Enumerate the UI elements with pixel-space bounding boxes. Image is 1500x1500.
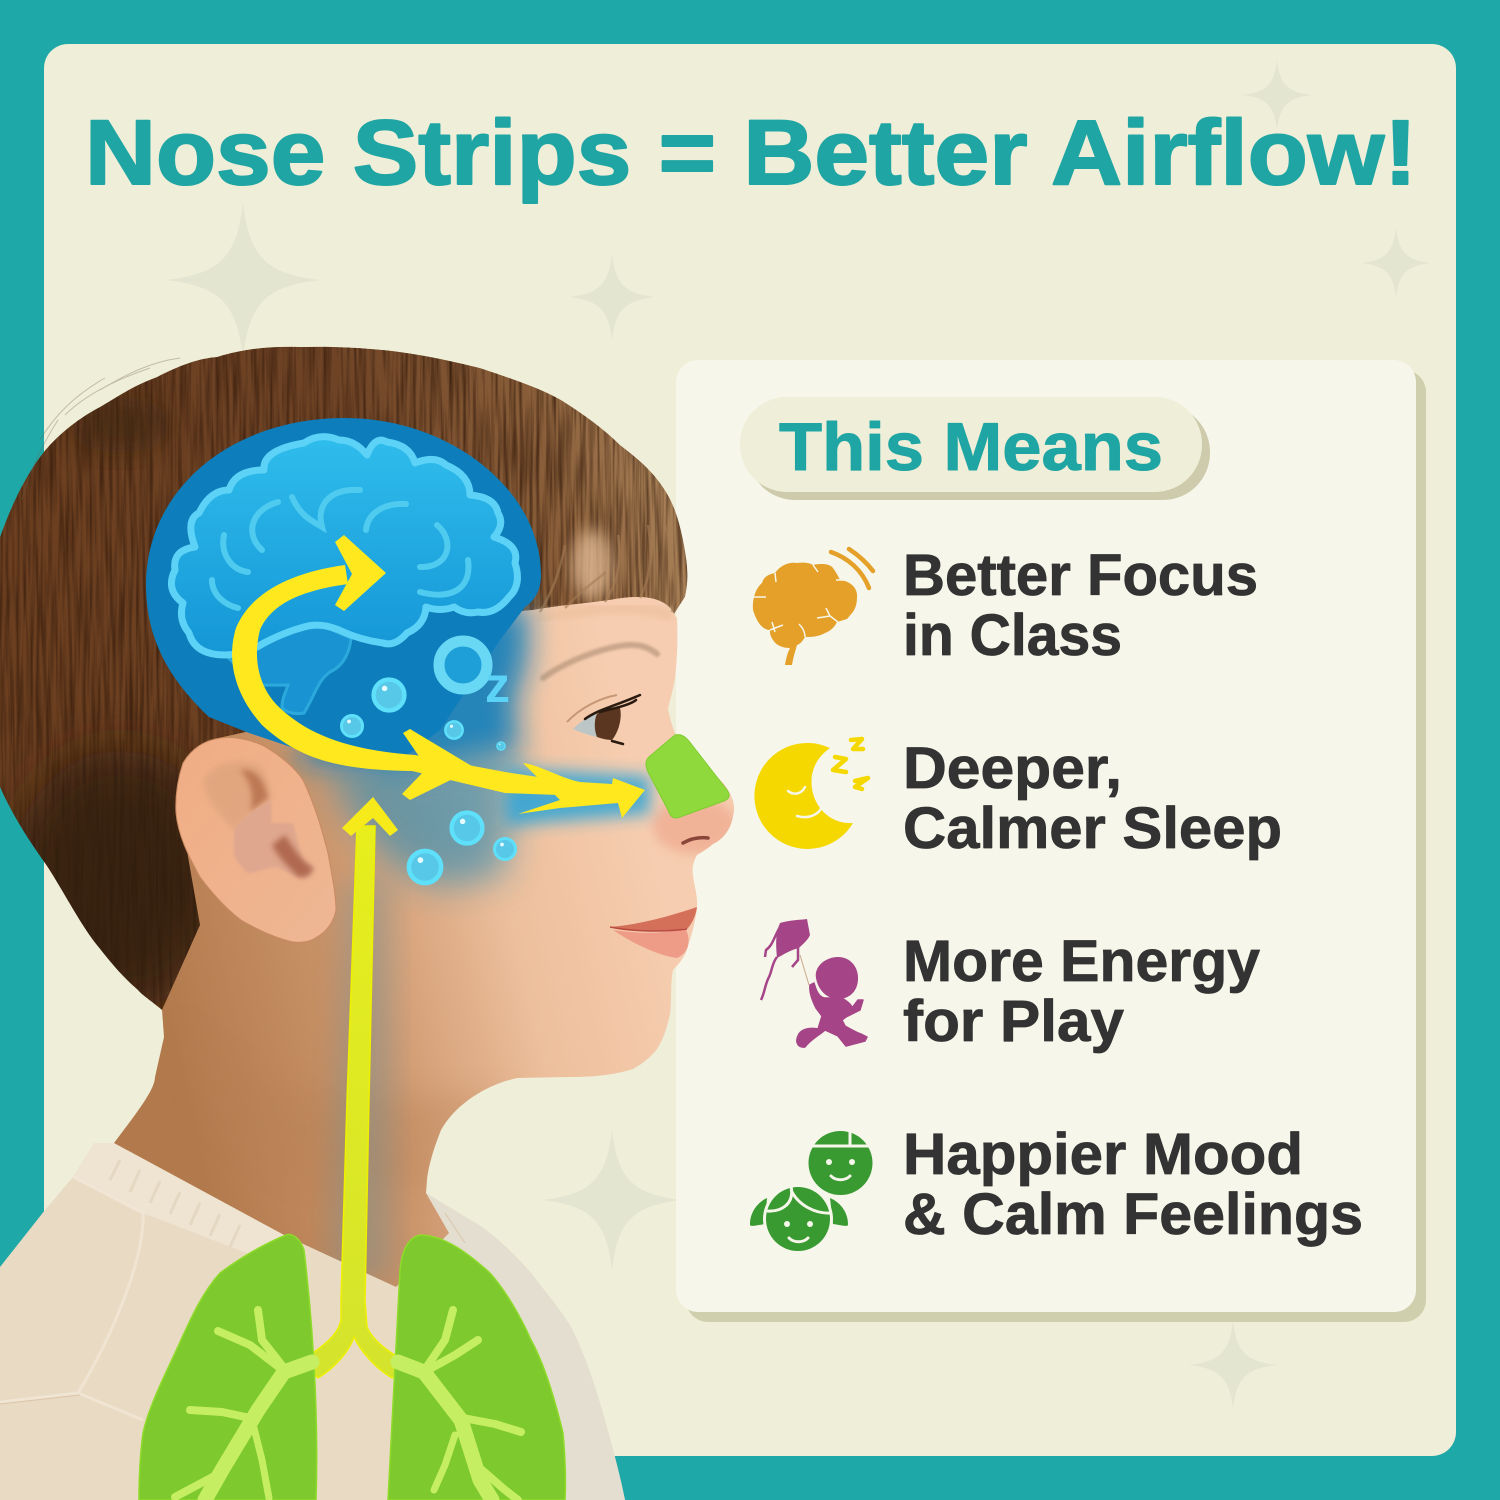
child illustration	[0, 347, 737, 1500]
brain	[171, 437, 517, 714]
windpipe glow	[330, 880, 392, 1280]
sparkle decorations	[166, 60, 1431, 1409]
text: happier mood: Happier Mood	[903, 1122, 1303, 1187]
fringe strands	[540, 525, 675, 612]
lungs	[139, 1235, 565, 1500]
text: calmer sleep: Deeper,	[903, 736, 1122, 801]
nape shadow	[10, 750, 230, 1010]
icon: moon	[754, 739, 868, 849]
nose wing	[653, 798, 737, 854]
right airways	[398, 1362, 492, 1500]
text: more energy	[903, 929, 1260, 1054]
arrow: airflow nose to brain	[232, 535, 645, 818]
icon: happy children	[750, 1130, 874, 1254]
text: happier mood	[903, 1122, 1363, 1247]
forehead highlight	[572, 529, 612, 601]
title: Nose Strips = Better Airflow!	[85, 102, 1417, 204]
arrow: lungs to nose windpipe	[300, 797, 410, 1378]
text: calmer sleep: Calmer Sleep	[903, 796, 1282, 861]
hair wisps	[22, 358, 180, 500]
O2 label: z	[485, 657, 510, 713]
eyebrow	[543, 645, 657, 678]
O2 label	[439, 641, 510, 713]
fringe edge softening	[535, 608, 672, 618]
bubbles	[342, 680, 516, 883]
icon: brain	[753, 549, 873, 665]
text: happier mood: & Calm Feelings	[903, 1182, 1363, 1247]
blue airflow glow	[290, 605, 650, 888]
text: calmer sleep	[903, 736, 1282, 861]
ear	[176, 737, 336, 942]
ear helix	[203, 761, 271, 830]
text: better focus: Better Focus	[903, 543, 1258, 608]
face and neck	[114, 520, 734, 1287]
pill heading	[740, 397, 1210, 500]
hair	[0, 347, 687, 1010]
nostril	[683, 838, 708, 843]
panel: this means	[676, 360, 1426, 1322]
eye	[567, 695, 640, 744]
text: better focus: in Class	[903, 603, 1122, 668]
pill heading: This Means	[779, 409, 1163, 485]
ear shadow	[272, 835, 313, 877]
ear conch	[234, 800, 314, 878]
text: more energy: for Play	[903, 989, 1124, 1054]
shirt	[0, 1143, 625, 1500]
brain backdrop	[146, 418, 541, 755]
text: better focus	[903, 543, 1258, 668]
jaw and neck shading	[180, 798, 737, 1280]
nose strip	[646, 735, 729, 818]
text: more energy: More Energy	[903, 929, 1260, 994]
crown shadow	[70, 397, 170, 453]
icon: child with kite	[761, 919, 867, 1047]
face details	[543, 645, 708, 958]
left airways	[175, 1310, 521, 1500]
lips	[610, 907, 697, 958]
